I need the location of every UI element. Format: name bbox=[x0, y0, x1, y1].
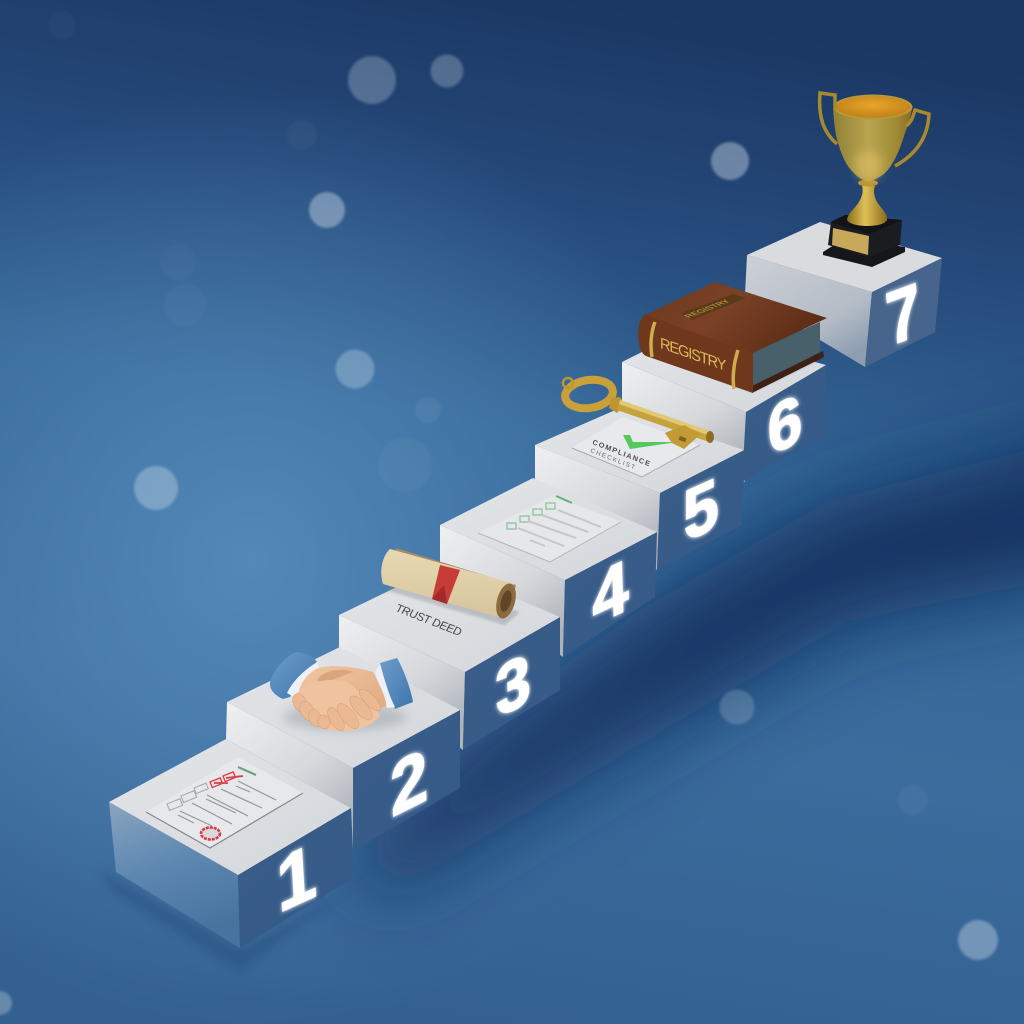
number 7: 7 bbox=[882, 267, 924, 362]
compliance checklist sheet: CHECKLIST bbox=[589, 447, 636, 471]
icon: handshake bbox=[270, 652, 413, 733]
book cover label: REGISTRY bbox=[682, 299, 733, 319]
application form sheet bbox=[146, 757, 303, 848]
step 5 block bbox=[535, 408, 744, 570]
icon: scroll bbox=[381, 548, 520, 625]
number 1: 1 bbox=[275, 828, 318, 930]
step 7 block bbox=[745, 222, 942, 367]
compliance checklist sheet bbox=[572, 417, 700, 477]
number 4: 4 bbox=[591, 544, 630, 641]
step 2 block bbox=[226, 647, 460, 850]
number 6: 6 bbox=[766, 380, 804, 471]
book spine title: REGISTRY bbox=[660, 335, 727, 375]
step 3 block bbox=[339, 566, 560, 750]
icon: trophy bbox=[820, 93, 929, 267]
cast shadow of staircase bbox=[100, 420, 1024, 970]
number 2: 2 bbox=[389, 732, 429, 833]
trust deed label: TRUST DEED bbox=[394, 602, 463, 639]
compliance checklist sheet: COMPLIANCE bbox=[591, 437, 651, 468]
step 1 block bbox=[109, 739, 353, 948]
step 4 block bbox=[440, 478, 657, 657]
number 3: 3 bbox=[494, 638, 532, 732]
number 5: 5 bbox=[681, 463, 720, 557]
icon: golden key bbox=[563, 377, 714, 449]
icon: registry book bbox=[638, 282, 827, 393]
step 6 block bbox=[622, 328, 826, 482]
checklist sheet bbox=[478, 496, 621, 562]
